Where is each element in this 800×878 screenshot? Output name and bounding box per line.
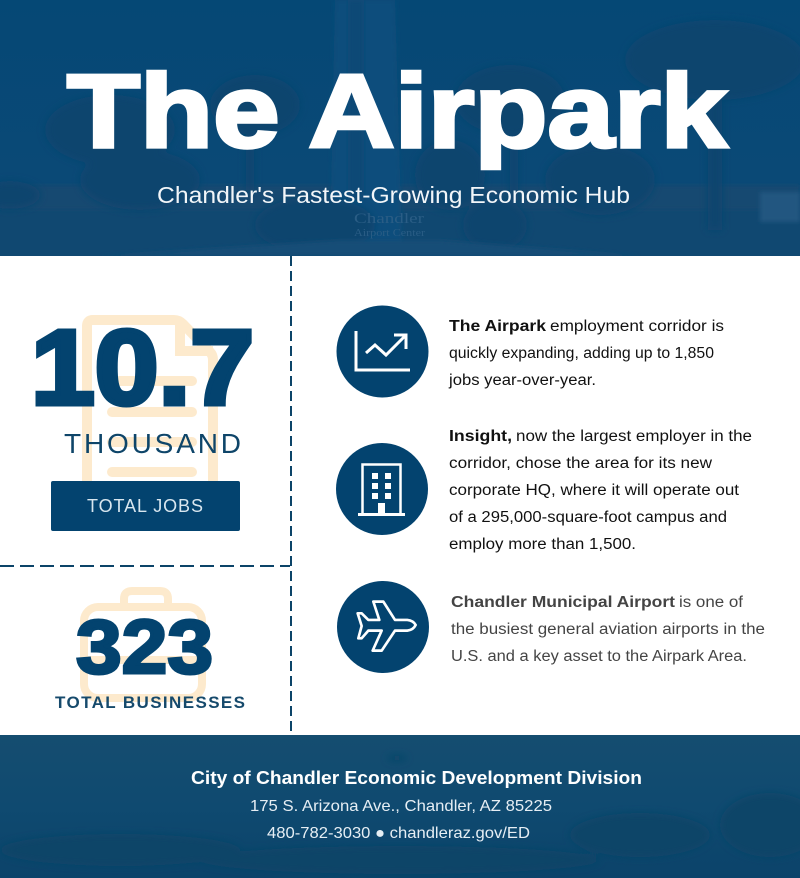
icon: growth chart xyxy=(336,306,428,398)
text: Insight headquarters: corporate HQ, where it will operate out xyxy=(449,482,740,499)
title: The Airpark xyxy=(67,54,727,170)
footer photo silhouettes xyxy=(392,756,800,816)
panel: total jobs stat xyxy=(31,309,254,531)
number: 10.7: 10.7 xyxy=(31,309,254,427)
text: employment corridor xyxy=(448,318,724,389)
text: employment corridor: The Airpark xyxy=(449,318,546,335)
text: Insight headquarters: Insight, xyxy=(449,428,512,445)
footer address: 175 S. Arizona Ave., Chandler, AZ 85225 xyxy=(250,798,552,815)
panel: footer with photo background xyxy=(0,735,800,878)
text: Insight headquarters: employ more than 1,500. xyxy=(449,536,636,553)
icon: document watermark xyxy=(87,320,213,481)
text: Insight headquarters: now the largest employer in the xyxy=(516,428,752,445)
text: Insight headquarters: corridor, chose the area for its new xyxy=(449,455,713,472)
sign text in photo: Chandler xyxy=(354,211,424,227)
icon: airplane xyxy=(337,581,429,673)
divider: horizontal dashed line xyxy=(0,565,290,567)
panel: Insight HQ item xyxy=(336,428,752,553)
text: Insight headquarters xyxy=(449,428,752,553)
text: employment corridor: quickly expanding, adding up to 1,850 xyxy=(449,345,714,362)
subtitle: Chandler's Fastest-Growing Economic Hub xyxy=(157,182,630,208)
header photo silhouettes xyxy=(0,0,800,256)
icon: office building xyxy=(336,443,428,535)
footer heading: City of Chandler Economic Development Division xyxy=(191,768,642,788)
text: Chandler Municipal Airport: Chandler Municipal Airport xyxy=(451,594,675,611)
text: Chandler Municipal Airport xyxy=(451,594,765,665)
text: employment corridor: jobs year-over-year. xyxy=(448,372,596,389)
badge: total jobs xyxy=(51,481,240,531)
divider: vertical dashed line xyxy=(290,256,292,736)
panel: total businesses stat xyxy=(55,591,245,712)
badge: total jobs: TOTAL JOBS xyxy=(87,496,203,516)
panel: header banner with photo background xyxy=(0,0,800,256)
text: employment corridor: employment corridor is xyxy=(550,318,724,335)
label: total businesses: TOTAL BUSINESSES xyxy=(55,693,245,712)
text: Chandler Municipal Airport: U.S. and a key asset to the Airpark Area. xyxy=(451,648,747,665)
text: Chandler Municipal Airport: the busiest general aviation airports in the xyxy=(451,621,765,638)
panel: municipal airport item xyxy=(337,581,765,673)
icon: briefcase watermark xyxy=(84,591,202,698)
header photo silhouettes: Airport Center xyxy=(354,227,425,239)
footer contact: 480-782-3030 ● chandleraz.gov/ED xyxy=(267,825,530,842)
number: 323: 323 xyxy=(76,605,213,690)
text: Chandler Municipal Airport: is one of xyxy=(679,594,744,611)
panel: employment growth item xyxy=(336,306,724,398)
label: thousand: THOUSAND xyxy=(64,428,241,459)
text: Insight headquarters: of a 295,000-square-foot campus and xyxy=(449,509,727,526)
